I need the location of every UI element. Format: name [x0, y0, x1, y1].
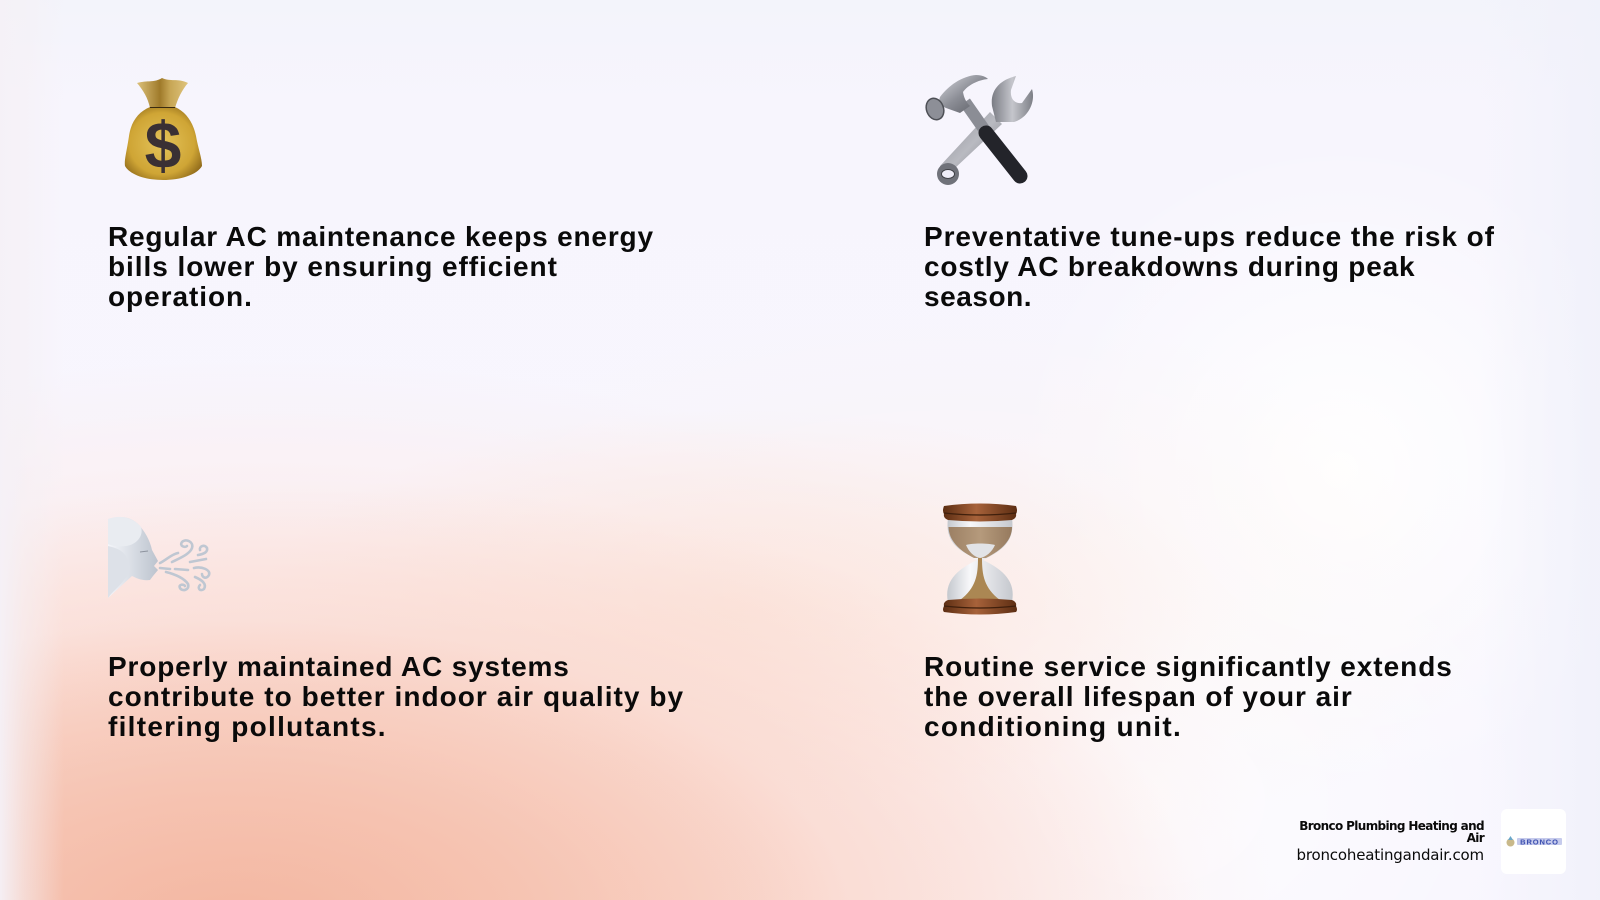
- text: breakdowns: Preventative tune-ups reduce the risk of: [924, 221, 1495, 252]
- logo mark: [1506, 836, 1562, 846]
- text: energy bills: operation.: [108, 281, 253, 312]
- text: breakdowns: [924, 221, 1495, 312]
- footer: company branding: [1296, 809, 1566, 874]
- text: air quality: [108, 651, 684, 742]
- panel: energy bills: [108, 78, 654, 312]
- logo mark: BRONCO: [1520, 837, 1559, 846]
- company url: broncoheatingandair.com: [1296, 846, 1484, 864]
- text: breakdowns: costly AC breakdowns during peak: [924, 251, 1415, 282]
- text: lifespan: [924, 651, 1453, 742]
- icon: money bag: [124, 78, 202, 182]
- icon: hammer and wrench: [925, 75, 1033, 185]
- panel: air quality: [108, 517, 684, 742]
- company name: Bronco Plumbing Heating and: [1299, 819, 1484, 833]
- icon: wind face: [108, 517, 210, 598]
- company name: [1299, 819, 1485, 845]
- text: energy bills: [108, 221, 654, 312]
- text: energy bills: bills lower by ensuring efficient: [108, 251, 558, 282]
- icon: hourglass: [943, 504, 1017, 614]
- panel: breakdowns: [924, 75, 1495, 312]
- text: breakdowns: season.: [924, 281, 1032, 312]
- icon: money bag: $: [145, 108, 181, 182]
- text: air quality: Properly maintained AC systems: [108, 651, 570, 682]
- text: lifespan: Routine service significantly extends: [924, 651, 1453, 682]
- text: lifespan: conditioning unit.: [924, 711, 1182, 742]
- text: air quality: contribute to better indoor air quality by: [108, 681, 684, 712]
- panel: lifespan: [924, 504, 1453, 742]
- company name: Air: [1467, 831, 1484, 845]
- text: air quality: filtering pollutants.: [108, 711, 387, 742]
- text: energy bills: Regular AC maintenance keeps energy: [108, 221, 654, 252]
- text: lifespan: the overall lifespan of your air: [924, 681, 1353, 712]
- logo tile: [1501, 809, 1566, 874]
